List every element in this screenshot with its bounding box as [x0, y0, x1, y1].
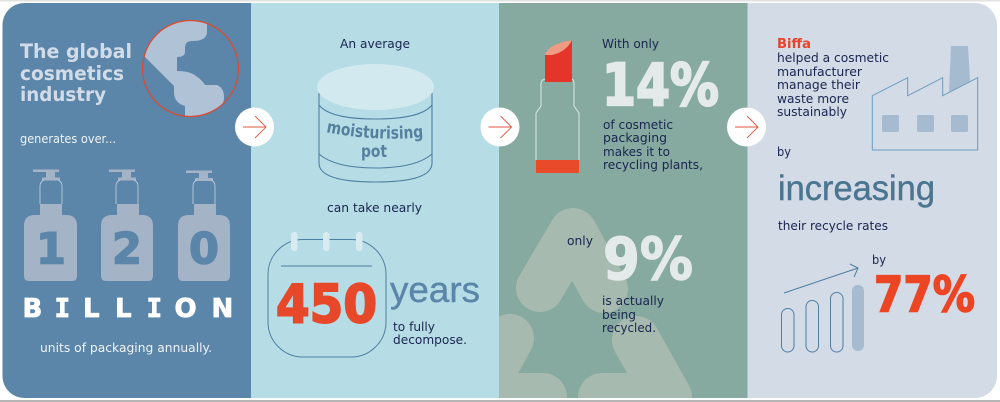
panel: moisturising pot	[251, 3, 499, 398]
text: of cosmetic packaging: recycling plants,	[603, 158, 703, 173]
text: generates over: generates over...	[20, 132, 116, 147]
text: biffa intro: manufacturer	[777, 65, 863, 80]
icon: bottle 1: 1	[36, 224, 66, 274]
icon: bottle 2: 2	[112, 224, 142, 274]
text: billion: L	[115, 294, 132, 324]
text: their recycle rates: their recycle rates	[778, 219, 888, 234]
arrow: panel 3 to 4	[727, 108, 766, 146]
icon: bottle 3: 0	[189, 224, 219, 274]
icon: bottle 3	[178, 170, 230, 281]
text: can take nearly: can take nearly	[327, 201, 422, 216]
heading: the global cosmetics industry: cosmetics	[20, 62, 124, 85]
text: billion: O	[174, 294, 197, 324]
text: biffa intro: helped a cosmetic	[777, 51, 889, 66]
icon: globe	[140, 20, 238, 125]
icon: moisturising pot: pot	[361, 142, 387, 162]
heading: the global cosmetics industry: industry	[20, 83, 106, 106]
text: billion: I	[54, 294, 70, 324]
text: to fully decompose	[393, 320, 467, 348]
heading: increasing: increasing	[778, 169, 935, 208]
icon: moisturising pot	[317, 64, 434, 182]
text: of cosmetic packaging: makes it to	[603, 145, 670, 160]
stat: 9%: 9%	[603, 225, 693, 293]
text: billion: L	[83, 294, 100, 324]
panel: recycling	[478, 3, 748, 398]
icon: calendar	[268, 232, 386, 357]
text: by: by	[872, 253, 886, 268]
text: biffa intro	[777, 36, 889, 120]
text: to fully decompose: decompose.	[393, 333, 467, 348]
text: billion: B	[22, 294, 42, 324]
icon: lipstick	[536, 40, 579, 173]
icon: bottle 2	[101, 170, 153, 281]
text: biffa intro: sustainably	[777, 105, 847, 120]
text: billion: N	[212, 294, 233, 324]
arrow: panel 1 to 2	[235, 108, 274, 146]
panel: biffa	[748, 3, 997, 398]
text: billion: I	[146, 294, 162, 324]
stat: 14%: 14%	[602, 51, 719, 119]
stat: 450: 450	[276, 274, 377, 336]
text: of cosmetic packaging: packaging	[603, 131, 667, 146]
heading: the global cosmetics industry: The global	[20, 40, 132, 63]
chart: rising bars	[782, 264, 864, 352]
text: biffa intro: waste more	[777, 92, 849, 107]
panel: global industry	[2, 3, 251, 398]
icon: recycling triangle	[478, 232, 668, 397]
icon: bottle 1	[24, 170, 77, 281]
text: of cosmetic packaging	[603, 118, 703, 173]
text: an average: An average	[340, 37, 410, 52]
text: with only: With only	[602, 37, 659, 52]
text: to fully decompose: to fully	[393, 320, 435, 335]
text: biffa intro: manage their	[777, 78, 861, 93]
icon: moisturising pot: moisturising	[327, 123, 422, 142]
text: is actually being recycled: recycled.	[602, 321, 656, 336]
heading: the global cosmetics industry	[20, 40, 132, 106]
text: is actually being recycled	[602, 294, 664, 336]
text: biffa intro: Biffa	[777, 36, 811, 52]
text: of cosmetic packaging: of cosmetic	[603, 118, 673, 133]
text: by: by	[777, 145, 791, 160]
stat: years: years	[390, 269, 480, 310]
arrow: rising trend	[784, 264, 858, 293]
stat: 77%: 77%	[874, 266, 975, 324]
icon: factory	[872, 46, 978, 150]
arrow: panel 2 to 3	[480, 108, 520, 146]
text: only: only	[567, 234, 593, 249]
text: is actually being recycled: is actually	[602, 294, 664, 309]
text: is actually being recycled: being	[602, 308, 636, 323]
text: units of packaging annually: units of packaging annually.	[40, 341, 212, 356]
